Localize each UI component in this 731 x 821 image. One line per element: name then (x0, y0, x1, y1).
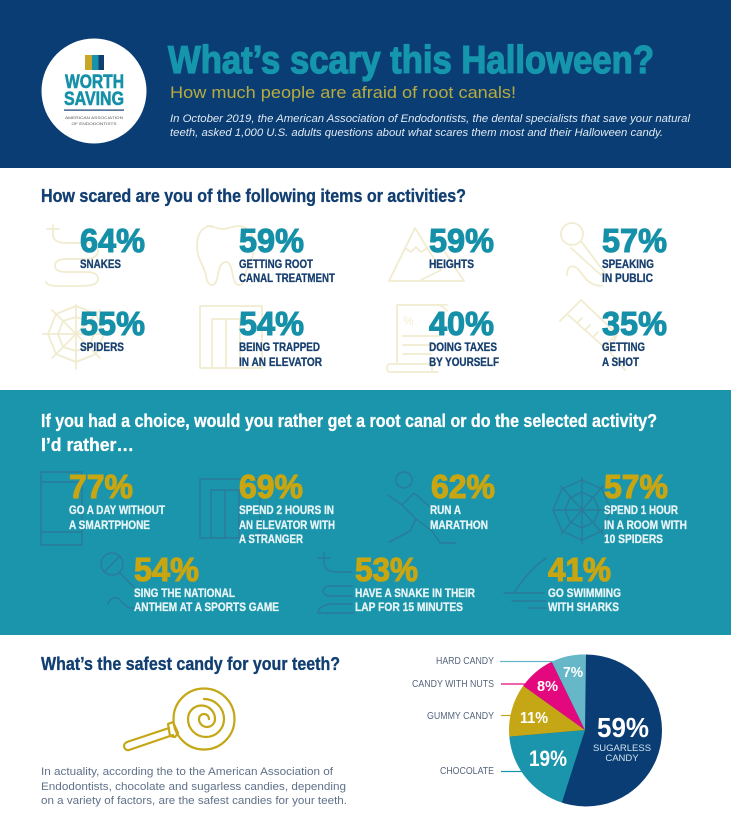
value: 55% (80, 305, 145, 342)
stat: marathon (388, 468, 495, 543)
stat: elevator with a stranger (200, 468, 335, 546)
label: BY YOURSELF (429, 355, 499, 369)
value: 59% (429, 222, 494, 259)
slice label: chocolate: 19% (529, 746, 567, 771)
logo: Worth Saving badge: SAVING (64, 89, 124, 110)
icon: microphone (101, 553, 140, 608)
slice label: sugarless: 59% (597, 712, 649, 743)
label: RUN A (430, 503, 461, 517)
legend: candy with nuts: CANDY WITH NUTS (412, 679, 494, 690)
label (602, 257, 654, 285)
label: DOING TAXES (429, 340, 497, 354)
label: LAP FOR 15 MINUTES (355, 600, 463, 614)
slice label: hard: 7% (563, 664, 583, 681)
body text: on a variety of factors, are the safest candies for your teeth. (41, 795, 347, 807)
value: 64% (80, 222, 145, 259)
label: SNAKES (80, 257, 121, 271)
icon: shark fin (504, 558, 546, 608)
label: AN ELEVATOR WITH (239, 518, 335, 532)
slice label: sugarless: SUGARLESS (593, 743, 651, 754)
stat: shot (560, 300, 667, 370)
icon: syringe (560, 300, 625, 370)
label (548, 586, 621, 614)
value: 35% (602, 305, 667, 342)
label (430, 503, 488, 532)
icon: spider web (43, 305, 104, 369)
heading: how scared: How scared are you of the following items or activities? (41, 186, 466, 206)
heading: would you rather: If you had a choice, would you rather get a root canal or do the selected activity? (41, 411, 657, 431)
label: BEING TRAPPED (239, 340, 320, 354)
label: SING THE NATIONAL (134, 586, 235, 600)
label: GO SWIMMING (548, 586, 621, 600)
label: WITH SHARKS (548, 600, 619, 614)
icon: runner (388, 472, 456, 543)
label: IN PUBLIC (602, 271, 653, 285)
value: 40% (429, 305, 494, 342)
panel: safest candy (0, 635, 731, 821)
label: IN AN ELEVATOR (239, 355, 322, 369)
heading: safest candy: What’s the safest candy for your teeth? (41, 654, 340, 674)
label (239, 257, 336, 285)
value: 41% (548, 551, 611, 588)
value: 77% (69, 468, 133, 505)
panel: how scared (0, 168, 731, 390)
label (429, 340, 499, 369)
logo: Worth Saving badge: WORTH (65, 72, 124, 93)
icon: elevator (200, 479, 260, 538)
stat: taxes (387, 305, 499, 372)
body text: Endodontists, chocolate and sugarless candies, depending (41, 781, 346, 793)
stat: national anthem (101, 551, 279, 614)
stat: sharks (504, 551, 621, 614)
label (604, 503, 687, 546)
heading: would you rather (41, 411, 657, 455)
title: What’s scary this Halloween? (168, 39, 654, 82)
label: ANTHEM AT A SPORTS GAME (134, 600, 279, 614)
label: A SHOT (602, 355, 640, 369)
label: SPIDERS (80, 340, 124, 354)
value: 59% (239, 222, 304, 259)
label: CANAL TREATMENT (239, 271, 336, 285)
stat: heights (389, 222, 494, 281)
value: 57% (602, 222, 667, 259)
slice label: sugarless (593, 712, 651, 764)
label (355, 586, 475, 614)
stat: snakes (46, 222, 145, 286)
label: IN A ROOM WITH (604, 518, 687, 532)
label: MARATHON (430, 518, 488, 532)
intro text: In October 2019, the American Association of Endodontists, the dental specialists that save your natural (170, 113, 691, 125)
legend: hard candy (436, 656, 553, 667)
legend: gummy candy: GUMMY CANDY (427, 711, 494, 722)
label: GO A DAY WITHOUT (69, 503, 166, 517)
value: 57% (604, 468, 668, 505)
stat: spiders (43, 305, 145, 369)
label: 10 SPIDERS (604, 532, 663, 546)
pie chart (509, 654, 662, 806)
label (602, 340, 645, 369)
intro text (170, 113, 691, 139)
icon: microphone (561, 223, 604, 286)
value: 54% (134, 551, 199, 588)
label: A STRANGER (239, 532, 303, 546)
label (69, 503, 166, 532)
body text: In actuality, according the to the American Association of (41, 766, 334, 778)
icon: smartphone (41, 472, 82, 545)
logo: Worth Saving badge: OF ENDODONTISTS (72, 121, 117, 126)
label: HAVE A SNAKE IN THEIR (355, 586, 475, 600)
icon: tax form: % (403, 314, 414, 328)
slice label: gummy: 11% (520, 710, 548, 727)
label: SPEND 1 HOUR (604, 503, 678, 517)
label (239, 503, 335, 546)
subtitle: How much people are afraid of root canals! (170, 83, 516, 102)
panel: header (0, 0, 731, 168)
icon: elevator (200, 306, 262, 368)
label: HEIGHTS (429, 257, 474, 271)
label (239, 340, 322, 369)
stat: room with spiders (553, 468, 687, 546)
stat: speaking in public (561, 222, 667, 286)
stat: root canal (197, 222, 336, 285)
legend: chocolate: CHOCOLATE (440, 766, 494, 777)
slice label: sugarless: CANDY (605, 753, 639, 764)
panel: would you rather (0, 390, 731, 635)
logo: Worth Saving badge (42, 38, 146, 144)
label: A SMARTPHONE (69, 518, 150, 532)
label: GETTING ROOT (239, 257, 314, 271)
icon: lollipop (124, 688, 234, 750)
heading: would you rather: I’d rather… (41, 435, 134, 455)
label: SPEND 2 HOURS IN (239, 503, 334, 517)
logo: Worth Saving badge: AMERICAN ASSOCIATION (65, 115, 123, 120)
label: SPEAKING (602, 257, 654, 271)
icon: mountain (389, 228, 464, 281)
icon: snake (46, 225, 98, 286)
slice label: nuts: 8% (537, 678, 558, 695)
value: 69% (239, 468, 303, 505)
stat: smartphone (41, 468, 166, 545)
intro text: teeth, asked 1,000 U.S. adults questions about what scares them most and their Halloween candy. (170, 127, 663, 139)
icon: tooth (197, 226, 254, 285)
value: 53% (355, 551, 418, 588)
label: GETTING (602, 340, 645, 354)
stat: snake in lap (318, 551, 475, 614)
value: 62% (431, 468, 495, 505)
icon: snake (318, 553, 354, 613)
value: 54% (239, 305, 304, 342)
icon: spider web (553, 478, 611, 544)
stat: elevator (200, 305, 322, 369)
label (134, 586, 279, 614)
legend: hard candy: HARD CANDY (436, 656, 494, 667)
body text (41, 766, 347, 807)
